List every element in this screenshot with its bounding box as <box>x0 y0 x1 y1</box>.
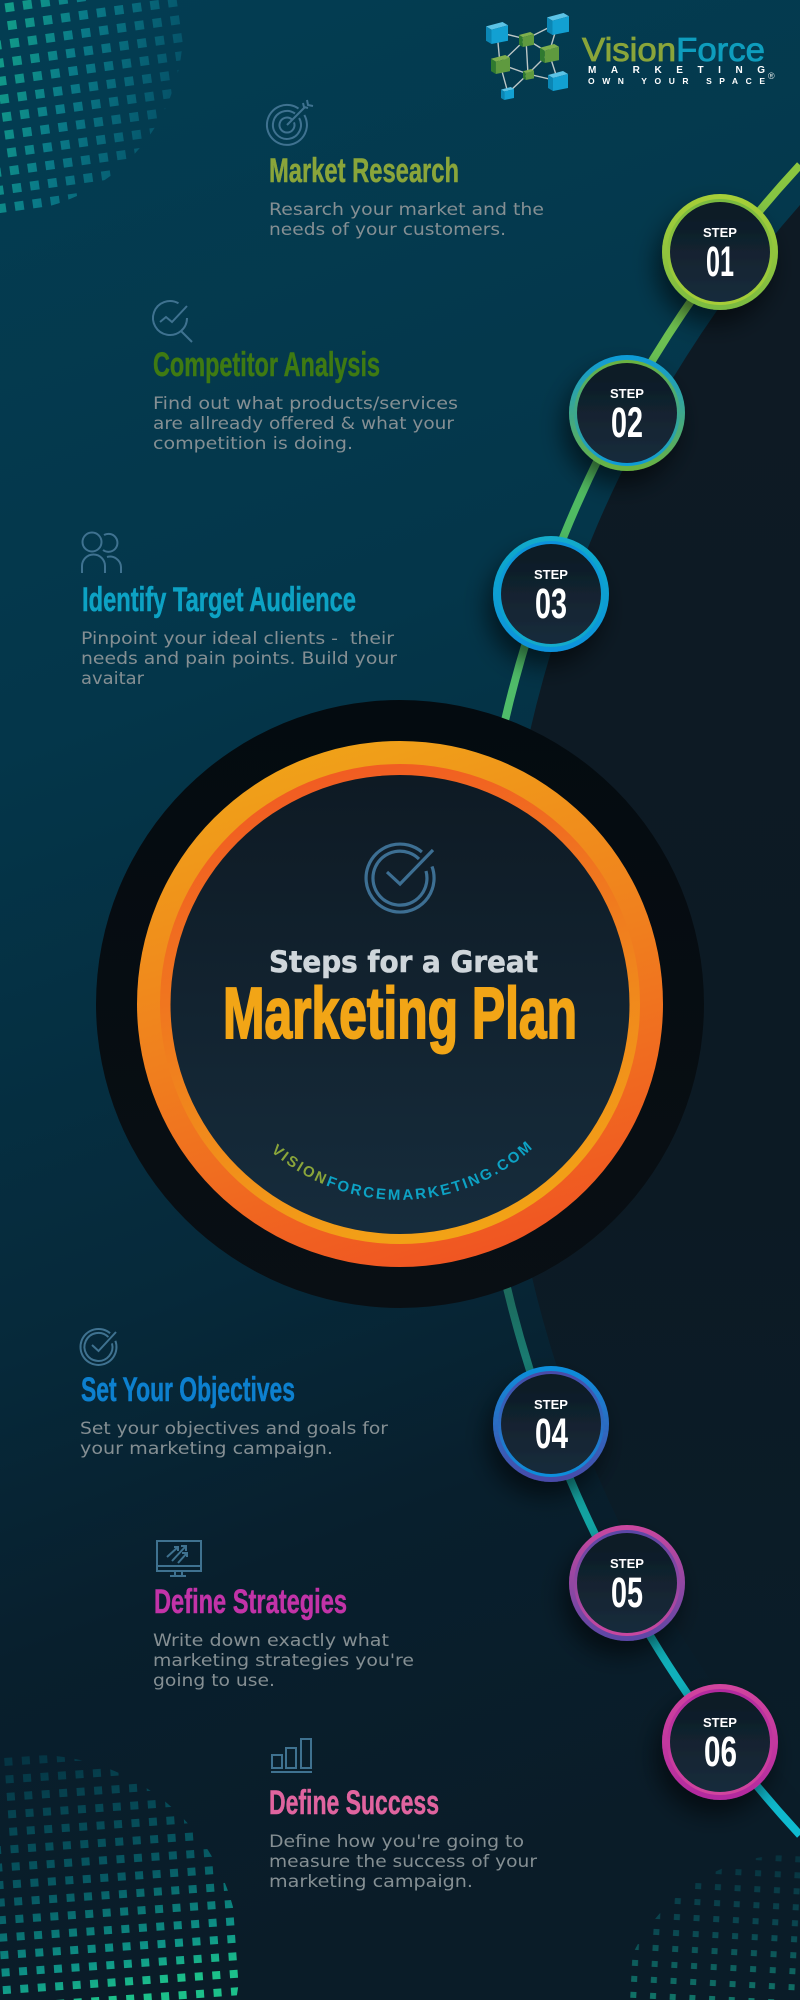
icon: bar chart <box>271 1739 312 1772</box>
text block: Write down exactly what <box>153 1631 389 1651</box>
step 1 marker: 01 <box>706 238 734 286</box>
text block <box>269 200 544 240</box>
logo: wordmark: VisionForce <box>582 31 765 68</box>
title line 2: Marketing Plan <box>223 974 577 1054</box>
step 3: identify target audience <box>81 532 397 689</box>
text block: avaitar <box>81 669 144 689</box>
halftone globe: top left <box>0 0 183 213</box>
step 2 marker: 02 <box>611 399 643 447</box>
curved url: VISIONFORCEMARKETING.COM <box>274 1141 532 1200</box>
dark right panel <box>500 205 800 1795</box>
text block: needs of your customers. <box>269 220 506 240</box>
logo: tagline: OWN YOUR SPACE <box>588 76 765 86</box>
logo: registered mark: ® <box>768 71 775 81</box>
text block <box>269 1832 537 1892</box>
inner disc <box>170 775 630 1234</box>
text block <box>153 394 458 454</box>
icon: monitor arrows <box>157 1541 201 1576</box>
heading: Market Research <box>269 152 459 190</box>
step 3 marker <box>493 536 609 652</box>
logo: marketing line: MARKETING <box>588 65 765 76</box>
text block: marketing campaign. <box>269 1872 473 1892</box>
text block: marketing strategies you're <box>153 1651 414 1671</box>
step 4 marker: STEP <box>534 1397 568 1412</box>
text block: Find out what products/services <box>153 394 458 414</box>
step 6: define success <box>269 1739 537 1892</box>
heading: Define Success <box>269 1784 439 1822</box>
step 3 marker: STEP <box>534 567 568 582</box>
heading: Identify Target Audience <box>82 581 356 619</box>
icon: check badge <box>80 1329 116 1365</box>
step 6 marker <box>662 1684 778 1800</box>
step 4 marker <box>493 1366 609 1482</box>
text block: competition is doing. <box>153 434 353 454</box>
halftone globe: bottom right <box>618 1855 800 2000</box>
text block: your marketing campaign. <box>80 1439 333 1459</box>
halftone globe: bottom left <box>0 1755 240 2000</box>
text block: Pinpoint your ideal clients - their <box>81 629 394 649</box>
step 2 marker <box>569 355 685 471</box>
text block: are allready offered & what your <box>153 414 454 434</box>
text block <box>81 629 397 689</box>
step 4 marker: 04 <box>535 1410 568 1458</box>
heading: Competitor Analysis <box>153 346 380 384</box>
logo <box>486 13 775 100</box>
step 2 marker: STEP <box>610 386 644 401</box>
logo: network icon <box>486 13 569 100</box>
title line 1: Steps for a Great <box>269 945 538 979</box>
text block: needs and pain points. Build your <box>81 649 397 669</box>
step 1: market research <box>267 100 544 240</box>
step 6 marker: 06 <box>704 1728 737 1776</box>
step 1 marker: STEP <box>703 225 737 240</box>
step 1 marker <box>662 194 778 310</box>
black outer disc <box>96 700 704 1308</box>
step 3 marker: 03 <box>535 580 567 628</box>
heading: Set Your Objectives <box>81 1371 295 1409</box>
orange outer ring <box>137 741 663 1267</box>
icon: magnifier chart <box>153 301 192 342</box>
step 2: competitor analysis <box>153 301 458 454</box>
step 5 marker: 05 <box>611 1569 643 1617</box>
central circle <box>96 700 704 1308</box>
text block: Set your objectives and goals for <box>80 1419 388 1439</box>
text block: Define how you're going to <box>269 1832 524 1852</box>
curved connector line <box>473 165 800 1835</box>
step 4: set your objectives <box>80 1329 388 1459</box>
icon: check badge <box>366 844 434 912</box>
step 5: define strategies <box>153 1541 414 1691</box>
step 6 marker: STEP <box>703 1715 737 1730</box>
text block <box>80 1419 388 1459</box>
heading: Define Strategies <box>154 1583 347 1621</box>
orange inner ring <box>160 764 640 1244</box>
step 5 marker <box>569 1525 685 1641</box>
step 5 marker: STEP <box>610 1556 644 1571</box>
text block: Resarch your market and the <box>269 200 544 220</box>
text block: measure the success of your <box>269 1852 537 1872</box>
icon: people <box>82 532 121 573</box>
text block: going to use. <box>153 1671 275 1691</box>
icon: target <box>267 100 313 145</box>
text block <box>153 1631 414 1691</box>
